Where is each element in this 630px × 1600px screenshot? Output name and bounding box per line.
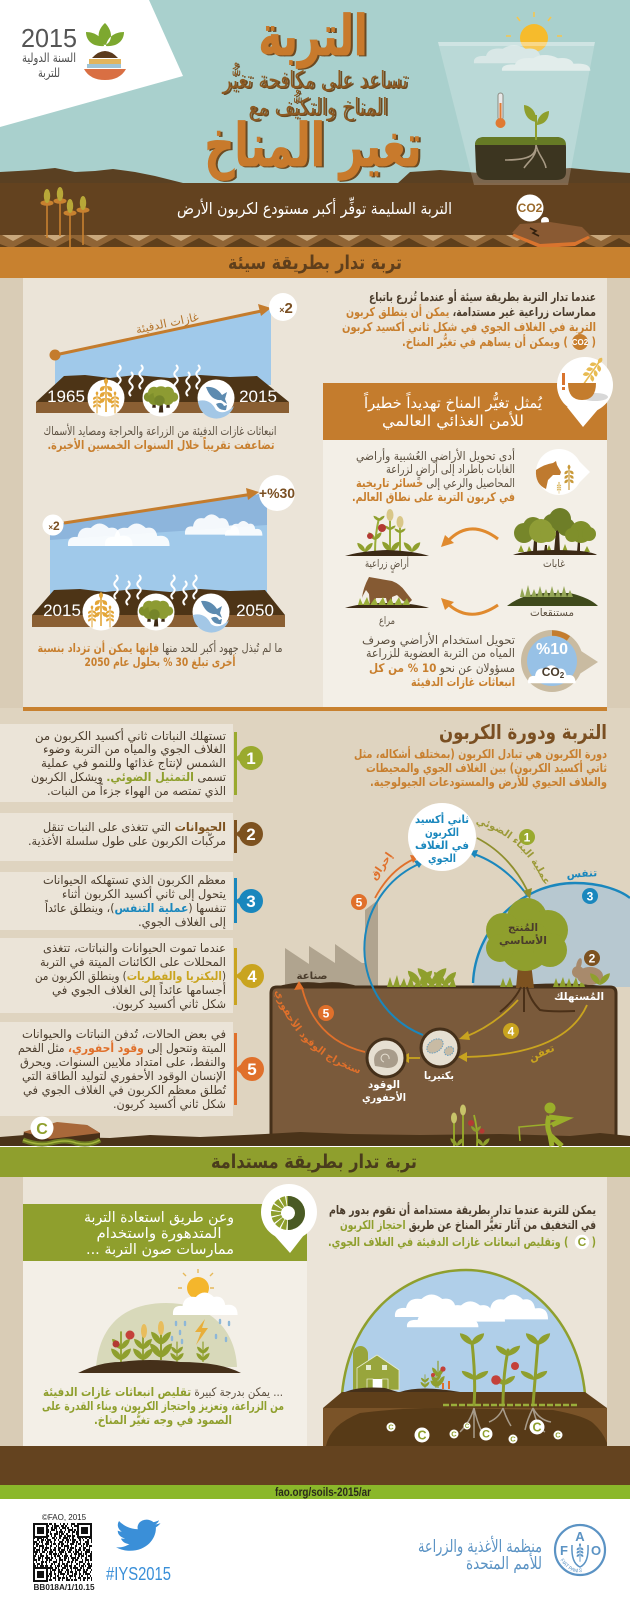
atmosphere CO2: ثاني أكسيد bbox=[415, 812, 469, 826]
section background: carbon cycle bbox=[0, 708, 630, 1146]
chart: greenhouse gases 1965 to 2015: ×2 bbox=[279, 300, 293, 317]
number badges: 5 bbox=[323, 1006, 330, 1020]
step 4: 4 bbox=[247, 967, 257, 986]
footer white bbox=[0, 1499, 630, 1600]
text: land use 10 percent: انبعاثات غازات الدفيئة bbox=[411, 675, 515, 690]
FAO logo: FIAT PANIS bbox=[560, 1558, 582, 1572]
step 2: 2 bbox=[246, 825, 256, 844]
diagram labels: الأحفوري bbox=[362, 1091, 406, 1104]
section background bbox=[0, 278, 630, 708]
icon: pasture with cow: مراع bbox=[379, 615, 395, 627]
QR code: ©FAO, 2015 bbox=[42, 1513, 87, 1522]
step 1: الذي تمتصه من الهواء جزءاً من النبات. bbox=[47, 782, 226, 799]
FAO organisation name: للأمم المتحدة bbox=[466, 1553, 542, 1574]
footer soil band bbox=[0, 1446, 630, 1485]
step 3: يتحول إلى ثاني أكسيد الكربون أثناء bbox=[62, 886, 226, 902]
illustration: sun, rain and crops bbox=[78, 1269, 241, 1373]
arrows bbox=[473, 883, 630, 983]
atmosphere CO2: الكربون bbox=[425, 826, 459, 839]
intro paragraph: ممارسات زراعية غير مستدامة، يمكن أن ينطلق كربون bbox=[346, 304, 596, 320]
tree: primary producer: الأساسي bbox=[499, 934, 547, 947]
icon: 10 percent CO2 gauge bbox=[521, 630, 598, 692]
diagram labels: تعفن bbox=[527, 1042, 556, 1064]
step 1: تستهلك النباتات ثاني أكسيد الكربون من bbox=[35, 728, 226, 744]
rock with carbon bbox=[23, 1116, 100, 1145]
step 5: في بعض الحالات، تُدفن النباتات والحيوانات bbox=[22, 1027, 226, 1042]
chart: greenhouse gases 1965 to 2015: 1965 bbox=[47, 387, 85, 406]
icon: wheat bowl pin bbox=[557, 354, 613, 427]
surface mounds bbox=[275, 982, 612, 987]
step 5: 5 bbox=[247, 1060, 257, 1079]
icon: cropland bbox=[345, 509, 429, 574]
website strip bbox=[0, 1485, 630, 1499]
rock with carbon: C bbox=[36, 1121, 48, 1138]
caption: 30 percent by 2050: ما لم تُبذل جهود أكبر للحد منها فإنها يمكن أن تزداد بنسبة bbox=[38, 640, 283, 656]
section banner: poorly managed soil: تربة تدار بطريقة سيئة bbox=[228, 252, 402, 274]
caption: emissions doubled bbox=[44, 423, 276, 453]
step 1: 1 bbox=[246, 749, 256, 768]
caption: reducing emissions: ... يمكن بدرجة كبيرة تقليص انبعاثات غازات الدفيئة bbox=[43, 1385, 283, 1400]
chart: greenhouse gases 1965 to 2015 bbox=[36, 293, 297, 419]
step 5: الميتة وتتحول إلى وقود أحفوري، مثل الفحم bbox=[18, 1040, 226, 1056]
icon: cropland: أراضٍ زراعية bbox=[365, 556, 409, 574]
caption: 30 percent by 2050 bbox=[38, 640, 283, 670]
atmosphere CO2: الجوي bbox=[428, 852, 456, 865]
tree: primary producer bbox=[486, 898, 575, 1012]
arrow: forests to cropland bbox=[441, 529, 498, 547]
header background: sky bbox=[0, 0, 630, 183]
step 2 bbox=[0, 813, 263, 861]
step 4: المحللات على الكائنات الميتة في التربة bbox=[40, 955, 226, 970]
diagram labels: عملية البناء الضوئي bbox=[476, 821, 548, 884]
text: land use 10 percent: مسؤولان عن نحو 10 % من كل bbox=[369, 661, 515, 676]
text: land conversion: في كربون التربة على نطاق العالم. bbox=[352, 490, 515, 505]
chart: greenhouse gases 2015 to 2050: ×2 bbox=[48, 519, 60, 533]
FAO organisation name: منظمة الأغذية والزراعة bbox=[418, 1536, 542, 1557]
FAO logo: F bbox=[560, 1543, 568, 1558]
callout: restoring degraded soil: المتدهورة واستخدام bbox=[96, 1226, 222, 1242]
step 1: الشمس لإنتاج غذائها وللنمو في عملية bbox=[41, 756, 226, 771]
icon: 10 percent CO2 gauge: 2 bbox=[560, 671, 565, 680]
description: carbon cycle bbox=[354, 746, 607, 790]
diagram labels: بكتيريا bbox=[424, 1070, 454, 1082]
number badges: 2 bbox=[589, 952, 596, 966]
glass jar with plant bbox=[438, 12, 595, 185]
arrow: wetlands to pasture bbox=[441, 598, 498, 614]
title: المناخ والتكيُّف مع bbox=[248, 88, 388, 121]
title: تساعد على مكافحة تغيُّر bbox=[222, 61, 408, 94]
step 5: تُطلق معظم الكربون في الغلاف الجوي في bbox=[23, 1083, 226, 1098]
grass bbox=[387, 975, 585, 987]
International Year of Soils logo: 2015 bbox=[21, 23, 77, 53]
title: تغير المناخ bbox=[204, 111, 422, 181]
number badges: 1 bbox=[524, 830, 531, 844]
chart: greenhouse gases 2015 to 2050: +%30 bbox=[259, 485, 295, 501]
number badges: 5 bbox=[356, 896, 363, 910]
step 1 bbox=[0, 724, 263, 802]
chart: greenhouse gases 1965 to 2015: غازات الدفيئة bbox=[134, 310, 200, 338]
caption: 30 percent by 2050: أخرى تبلغ 30 % بحلول عام 2050 bbox=[85, 654, 236, 670]
diagram labels: إحراق bbox=[368, 850, 395, 882]
icon: cow and wheat pin bbox=[536, 449, 590, 495]
step 3: تنفسها (عملية التنفس)، وينطلق عائداً bbox=[45, 899, 226, 916]
chart: greenhouse gases 2015 to 2050: 2050 bbox=[236, 601, 274, 620]
chart: greenhouse gases 1965 to 2015: 2015 bbox=[239, 387, 277, 406]
icon: wetlands bbox=[507, 585, 598, 619]
callout: restoring degraded soil: ممارسات صون التربة ... bbox=[86, 1242, 234, 1258]
International Year of Soils logo bbox=[21, 23, 126, 81]
diagram labels: تنفس bbox=[566, 867, 598, 881]
text: land conversion bbox=[352, 448, 515, 505]
step 3 bbox=[0, 872, 263, 930]
section banner: sustainably managed soil: تربة تدار بطريقة مستدامة bbox=[211, 1151, 417, 1173]
carbon cycle diagram bbox=[270, 803, 630, 1136]
section banner: poorly managed soil bbox=[0, 247, 630, 278]
icon: soil ring pin bbox=[261, 1184, 317, 1253]
tree: primary producer: المُنتج bbox=[508, 922, 538, 934]
icon: Twitter bird bbox=[116, 1520, 160, 1551]
icon: 10 percent CO2 gauge: %10 bbox=[536, 641, 568, 658]
number badges bbox=[318, 829, 600, 1039]
text: land conversion: الغابات باطراد إلى أراضٍ لزراعة bbox=[386, 461, 515, 480]
step 1: الغلاف الجوي والمياه من التربة وضوء bbox=[43, 742, 226, 757]
chart: greenhouse gases 2015 to 2050: 2015 bbox=[43, 601, 81, 620]
step 4: (البكتريا والفطريات) وينطلق الكربون من bbox=[35, 969, 226, 984]
step 5 bbox=[0, 1022, 264, 1116]
caption: emissions doubled: انبعاثات غازات الدفيئة من الزراعة والحراجة ومصايد الأسماك bbox=[44, 423, 276, 439]
diagram labels: المُستهلك bbox=[554, 991, 604, 1003]
icon: CO2 from cracked soil bbox=[512, 194, 590, 248]
diagram labels: استخراج الوقود الأحفوري bbox=[274, 991, 360, 1074]
caption: reducing emissions: الصمود في وجه تغيُّر المناخ. bbox=[94, 1411, 232, 1428]
FAO logo: O bbox=[591, 1543, 601, 1558]
step 5: الإنسان الوقود الأحفوري لتوليد الطاقة التي bbox=[22, 1068, 226, 1084]
caption: reducing emissions: من الزراعة، وتعزيز واحتجاز الكربون، وبناء القدرة على bbox=[42, 1399, 284, 1414]
website strip: fao.org/soils-2015/ar bbox=[275, 1485, 371, 1499]
intro paragraph: sustainable bbox=[328, 1202, 596, 1250]
section banner: sustainably managed soil bbox=[0, 1147, 630, 1177]
soil statement: التربة السليمة توفِّر أكبر مستودع لكربون الأرض bbox=[177, 196, 452, 219]
text: land conversion: أدى تحويل الأراضي العُشبية وأراضي bbox=[356, 448, 515, 464]
text: land use 10 percent: المياه من التربة العضوية للزراعة bbox=[366, 646, 515, 661]
icon: forests bbox=[513, 508, 597, 570]
caption: emissions doubled: تضاعفت تقريباً خلال السنوات الخمسين الأخيرة. bbox=[48, 436, 274, 453]
step 3: 3 bbox=[246, 892, 256, 911]
icon: wetlands: مستنقعات bbox=[530, 607, 574, 619]
icon: CO2 from cracked soil: CO2 bbox=[518, 201, 543, 215]
step 2: مركّبات الكربون على طول سلسلة الأغذية. bbox=[28, 833, 226, 849]
rabbit bbox=[572, 958, 610, 985]
QR code: BB018A/1/10.15 bbox=[34, 1583, 95, 1592]
soil band with hills bbox=[0, 168, 630, 247]
step 4: عندما تموت الحيوانات والنباتات، تتغذى bbox=[43, 941, 226, 956]
chart: greenhouse gases 2015 to 2050 bbox=[32, 475, 295, 633]
number badges: 3 bbox=[587, 890, 594, 904]
diagram labels: الوقود bbox=[368, 1079, 400, 1091]
icon: pasture with cow bbox=[345, 577, 429, 627]
step 3: إلى الغلاف الجوي. bbox=[138, 915, 226, 930]
atmosphere CO2: في الغلاف bbox=[415, 839, 469, 852]
FAO logo bbox=[554, 1524, 606, 1576]
step 1: تسمى التمثيل الضوئي. ويشكل الكربون bbox=[31, 770, 226, 785]
step 5: شكل ثاني أكسيد كربون. bbox=[113, 1096, 226, 1112]
caption: reducing emissions bbox=[42, 1385, 284, 1428]
text: land use 10 percent bbox=[362, 632, 515, 690]
step 4: أجسامها عائداً إلى الغلاف الجوي في bbox=[52, 981, 226, 998]
intro paragraph bbox=[342, 289, 596, 350]
diagram labels: صناعة bbox=[296, 971, 328, 982]
bacteria circle bbox=[421, 1029, 459, 1067]
text: land use 10 percent: تحويل استخدام الأراضي وصرف bbox=[362, 632, 515, 648]
step 4 bbox=[0, 938, 264, 1013]
step 3: معظم الكربون الذي تستهلكه الحيوانات bbox=[43, 873, 226, 888]
callout: food security: للأمن الغذائي العالمي bbox=[382, 411, 524, 431]
divider bar bbox=[23, 707, 607, 711]
icon: forests: غابات bbox=[543, 558, 565, 570]
title bbox=[204, 4, 422, 181]
callout: food security bbox=[323, 383, 607, 440]
callout: restoring degraded soil: وعن طريق استعادة التربة bbox=[84, 1210, 234, 1226]
section background bbox=[0, 1177, 630, 1446]
icon: 10 percent CO2 gauge: CO bbox=[542, 665, 560, 679]
number badges: 4 bbox=[508, 1024, 515, 1038]
QR code bbox=[33, 1513, 95, 1592]
text: land conversion: المحاصيل والرعي إلى خسائر تاريخية bbox=[356, 476, 515, 491]
soil block bbox=[271, 987, 616, 1140]
illustration: dome farm with carbon in soil bbox=[323, 1270, 607, 1446]
title: التربة bbox=[258, 4, 368, 69]
step 2: الحيوانات التي تتغذى على النبات تنقل bbox=[43, 820, 226, 835]
FAO organisation name bbox=[418, 1536, 542, 1574]
intro paragraph: CO2 bbox=[572, 338, 589, 347]
FAO logo: A bbox=[575, 1529, 585, 1544]
white logo corner bbox=[0, 0, 183, 127]
International Year of Soils logo: للتربة bbox=[38, 65, 60, 81]
callout: food security: يُمثل تغيُّر المناخ تهديداً خطيراً bbox=[363, 391, 542, 412]
callout: restoring degraded soil bbox=[23, 1204, 307, 1261]
respiration dome bbox=[473, 883, 630, 987]
wheat plants bbox=[40, 187, 90, 248]
hashtag: #IYS2015 bbox=[106, 1564, 171, 1584]
step 4: شكل ثاني أكسيد كربون. bbox=[112, 996, 226, 1012]
factory bbox=[285, 900, 378, 987]
International Year of Soils logo: السنة الدولية bbox=[22, 50, 76, 66]
diagram labels bbox=[26, 821, 604, 1144]
step 5: والنفط، على امتداد ملايين السنوات. ويحرق bbox=[20, 1055, 226, 1070]
ground with plants and farmer bbox=[0, 1102, 630, 1146]
atmosphere CO2 bbox=[408, 803, 476, 871]
fossil circle bbox=[367, 1039, 405, 1077]
